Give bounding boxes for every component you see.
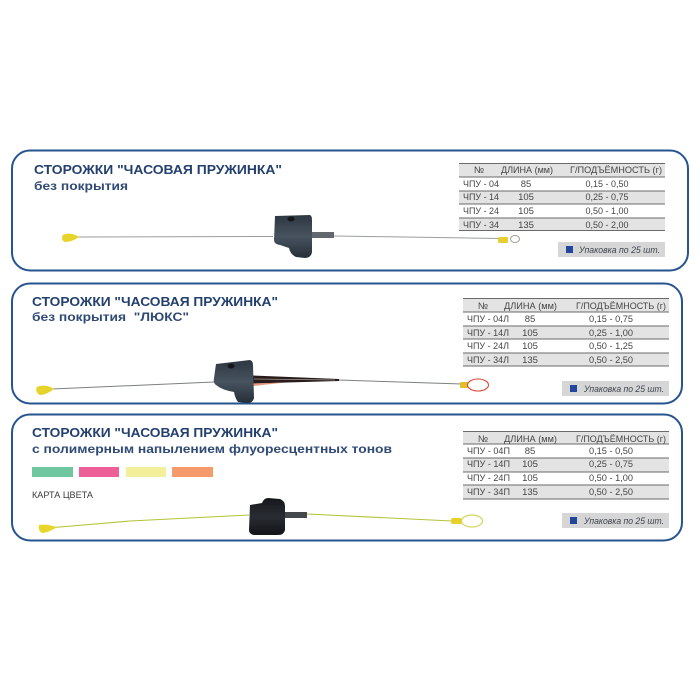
- panel 2 spec table: 0,50 - 2,50: [589, 355, 633, 366]
- panel 1 spec table: 0,15 - 0,50: [586, 179, 628, 190]
- panel 3 subheading: с полимерным напылением флуоресцентных тонов: [32, 444, 392, 456]
- panel 1 subheading: без покрытия: [34, 181, 128, 193]
- panel 1 spec table: [459, 163, 665, 231]
- dark body: [214, 360, 254, 403]
- panel 3 spec table: 0,50 - 1,00: [589, 473, 633, 484]
- panel 2 spec table: Г/ПОДЪЁМНОСТЬ (г): [576, 301, 666, 312]
- panel 3 product: fluorescent spring indicator: [39, 498, 483, 535]
- yellow sleeve: [451, 518, 462, 524]
- yellow sleeve: [460, 382, 470, 388]
- panel 1 spec table: ЧПУ - 34: [463, 220, 499, 231]
- dark body: [274, 215, 312, 258]
- panel 1 spec table: 0,50 - 1,00: [586, 206, 628, 217]
- panel 1 product: spring indicator: [62, 215, 520, 258]
- panel 2 packaging badge: Упаковка по 25 шт.: [583, 384, 664, 394]
- panel 3 spec table: ЧПУ - 34П: [467, 487, 510, 498]
- panel 1 spec table: ДЛИНА (мм): [501, 165, 553, 176]
- panel 3 spec table: 0,15 - 0,50: [589, 446, 633, 457]
- panel: fluorescent coated spring bite indicators: [12, 414, 682, 540]
- panel 2 spec table: ЧПУ - 04Л: [467, 314, 509, 325]
- metal pin: [310, 232, 334, 238]
- panel 3 frame: [12, 414, 682, 540]
- yellow wire loop: [462, 515, 482, 527]
- panel 2 spec table: №: [478, 301, 488, 312]
- red wire loop: [468, 379, 488, 391]
- panel 2 spec table: 135: [522, 355, 538, 366]
- panel 1 packaging badge: Упаковка по 25 шт.: [578, 245, 660, 255]
- panel 1 spec table: 0,50 - 2,00: [586, 220, 628, 231]
- metal pin: [284, 512, 307, 518]
- panel 2 spec table: [463, 298, 669, 366]
- panel 3 spec table: №: [478, 434, 488, 445]
- yellow tip: [62, 234, 79, 242]
- panel 1 packaging badge: [558, 242, 665, 257]
- panel 3 spec table: 105: [522, 459, 538, 470]
- black body: [249, 498, 285, 535]
- yellow sleeve: [498, 237, 508, 243]
- panel 2 product: lux spring indicator: [36, 360, 488, 403]
- panel 2 heading: СТОРОЖКИ "ЧАСОВАЯ ПРУЖИНКА": [32, 295, 278, 309]
- panel 3 spec table: Г/ПОДЪЁМНОСТЬ (г): [576, 434, 666, 445]
- panel 3 spec table: 0,25 - 0,75: [589, 459, 633, 470]
- panel 3 packaging badge: Упаковка по 25 шт.: [583, 516, 664, 526]
- panel 1 spec table: ЧПУ - 24: [463, 206, 499, 217]
- panel 3 spec table: [463, 431, 669, 499]
- panel 2 spec table: 105: [522, 328, 538, 339]
- panel 2 frame: [12, 284, 682, 404]
- wire loop: [510, 236, 520, 242]
- panel 1 frame: [12, 150, 688, 270]
- panel 1 spec table: ЧПУ - 04: [463, 179, 499, 190]
- panel 3 spec table: 105: [522, 473, 538, 484]
- panel 2 spec table: 85: [525, 314, 535, 325]
- faint red glow under cone: [253, 382, 285, 386]
- panel 1 spec table: 105: [518, 206, 534, 217]
- panel 2 spec table: 0,50 - 1,25: [589, 341, 633, 352]
- tapered dark cone with light stripe: [252, 376, 339, 384]
- panel 3 spec table: ЧПУ - 24П: [467, 473, 510, 484]
- panel 3 spec table: ДЛИНА (мм): [504, 434, 557, 445]
- yellow tip: [36, 386, 54, 395]
- panel 3 spec table: 0,50 - 2,50: [589, 487, 633, 498]
- panel 3 heading: СТОРОЖКИ "ЧАСОВАЯ ПРУЖИНКА": [32, 426, 278, 440]
- body hole: [228, 364, 234, 368]
- yellow tip: [39, 525, 57, 533]
- panel 1 spec table: 105: [518, 192, 534, 203]
- panel 2 spec table: ЧПУ - 14Л: [467, 328, 509, 339]
- panel: lux spring bite indicators: [12, 284, 682, 404]
- panel 2 spec table: 105: [522, 341, 538, 352]
- panel 1 spec table: 85: [521, 179, 531, 190]
- panel 2 packaging badge: [562, 381, 669, 396]
- panel 1 spec table: Г/ПОДЪЁМНОСТЬ (г): [570, 165, 662, 176]
- panel 1 spec table: ЧПУ - 14: [463, 192, 499, 203]
- panel 3 spec table: ЧПУ - 14П: [467, 459, 510, 470]
- panel 1 spec table: 0,25 - 0,75: [586, 192, 628, 203]
- colour swatches: [32, 467, 213, 477]
- panel 3 spec table: 85: [525, 446, 535, 457]
- panel 2 spec table: 0,25 - 1,00: [589, 328, 633, 339]
- panel 2 spec table: 0,15 - 0,75: [589, 314, 633, 325]
- panel 1 spec table: 135: [518, 220, 534, 231]
- panel 1 spec table: №: [474, 165, 484, 176]
- panel 2 subheading: без покрытия "ЛЮКС": [32, 312, 189, 324]
- panel 2 spec table: ДЛИНА (мм): [504, 301, 557, 312]
- panel 2 spec table: ЧПУ - 24Л: [467, 341, 509, 352]
- body hole: [288, 216, 294, 222]
- panel 3 packaging badge: [562, 513, 669, 528]
- panel 3 spec table: ЧПУ - 04П: [467, 446, 510, 457]
- colour card label: КАРТА ЦВЕТА: [32, 490, 93, 500]
- panel: uncoated spring bite indicators: [12, 150, 688, 270]
- panel 1 heading: СТОРОЖКИ "ЧАСОВАЯ ПРУЖИНКА": [34, 163, 282, 177]
- panel 3 spec table: 135: [522, 487, 538, 498]
- panel 2 spec table: ЧПУ - 34Л: [467, 355, 509, 366]
